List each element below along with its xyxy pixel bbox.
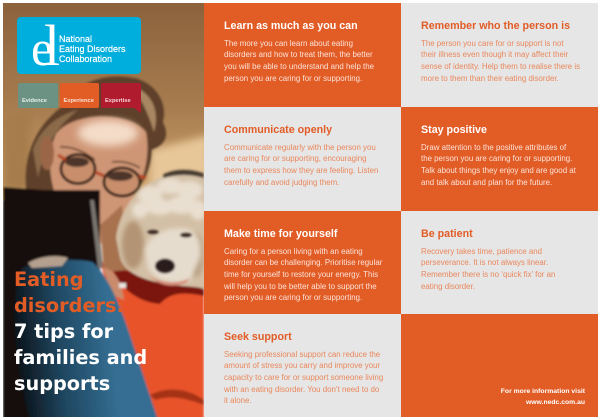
panel: more information [401, 314, 598, 417]
text: disorder can be challenging. Prioritise regular [224, 258, 382, 267]
tag: Evidence [18, 83, 58, 108]
text: with an eating disorder. You don’t need to do [224, 385, 379, 394]
panel: Stay positive [401, 107, 598, 211]
text: amount of stress you carry and improve your [224, 361, 380, 370]
logo text: Collaboration [59, 54, 112, 64]
panel: Seek support [204, 314, 401, 417]
heading: Stay positive [421, 124, 487, 136]
title: 7 tips for [14, 320, 113, 343]
text [421, 38, 580, 83]
heading: Make time for yourself [224, 228, 337, 240]
tag: Experience [60, 83, 99, 108]
text: Communicate regularly with the person you [224, 142, 376, 152]
tablet [3, 187, 103, 268]
text [224, 142, 378, 187]
title: Eating [14, 268, 84, 291]
tablet and dark shadow [3, 190, 100, 420]
text: the person you are caring for or supporting. [421, 154, 572, 163]
text: eating disorder. [421, 282, 475, 291]
hand [103, 268, 124, 300]
logo panel [17, 17, 141, 74]
contact text [501, 388, 585, 406]
text: sense of identity. Help them to realise there is [421, 62, 580, 71]
text [224, 38, 374, 83]
text: will help you to be better able to support the [224, 282, 377, 291]
heading: Seek support [224, 331, 292, 343]
logo text [59, 34, 126, 64]
neck skin [100, 205, 128, 272]
panel: Learn as much as you can [204, 3, 401, 107]
contact text: For more information visit [501, 388, 585, 395]
text: The person you care for or support is not [421, 38, 564, 48]
text: Caring for a person living with an eating [224, 246, 363, 256]
glasses [61, 154, 140, 196]
tag: Expertise [101, 83, 141, 113]
red shirt [100, 262, 204, 420]
tag: Experience: Experience [64, 98, 94, 104]
face [50, 116, 147, 250]
hair [25, 76, 166, 205]
text: perseverance. It is not always linear. [421, 258, 548, 267]
text: carefully and avoid judging them. [224, 178, 339, 187]
heading: Remember who the person is [421, 20, 570, 32]
panel: Remember who the person is [401, 3, 598, 107]
title: supports [14, 372, 110, 395]
title: disorders: [14, 294, 124, 317]
text: The more you can learn about eating [224, 38, 353, 48]
title: families and [14, 346, 147, 369]
text: more to them than their eating disorder. [421, 74, 559, 83]
heading: Communicate openly [224, 124, 332, 136]
text [421, 246, 555, 291]
tag: Expertise: Expertise [105, 98, 131, 104]
text: person you are caring for or supporting. [224, 293, 362, 302]
text: disorders and how to treat them, the better [224, 50, 373, 59]
panel: Be patient [401, 211, 598, 314]
text: time for yourself to restore your energy. This [224, 270, 378, 279]
text: it alone. [224, 396, 252, 405]
text: Remember there is no ‘quick fix’ for an [421, 270, 555, 279]
heading: Learn as much as you can [224, 20, 358, 32]
photo: woman with dog and tablet [3, 3, 204, 417]
text: you will be able to understand and help the [224, 62, 374, 71]
text: them to express how they are feeling. Listen [224, 166, 378, 175]
title [14, 268, 147, 395]
text: Seeking professional support can reduce the [224, 350, 380, 358]
text: Recovery takes time, patience and [421, 246, 542, 256]
tag: Evidence: Evidence [22, 98, 47, 104]
text [224, 246, 382, 302]
text [224, 350, 383, 405]
contact text: www.nedc.com.au [526, 399, 585, 406]
text: Draw attention to the positive attributes of [421, 142, 566, 152]
text: Talk about things they enjoy and are good at [421, 166, 576, 175]
text: are caring for or supporting, encouraging [224, 154, 367, 163]
jeans [14, 260, 158, 420]
text: person you are caring for or supporting. [224, 74, 362, 83]
dog [116, 172, 210, 292]
text: and talk about and plan for the future. [421, 178, 552, 187]
text: capacity to care for or support someone living [224, 373, 383, 382]
text [421, 142, 576, 187]
panel: Communicate openly [204, 107, 401, 211]
logo text: Eating Disorders [59, 44, 126, 54]
text: their illness even though it may affect their [421, 50, 568, 59]
logo text: National [59, 34, 92, 44]
panel: Make time for yourself [204, 211, 401, 314]
heading: Be patient [421, 228, 473, 240]
